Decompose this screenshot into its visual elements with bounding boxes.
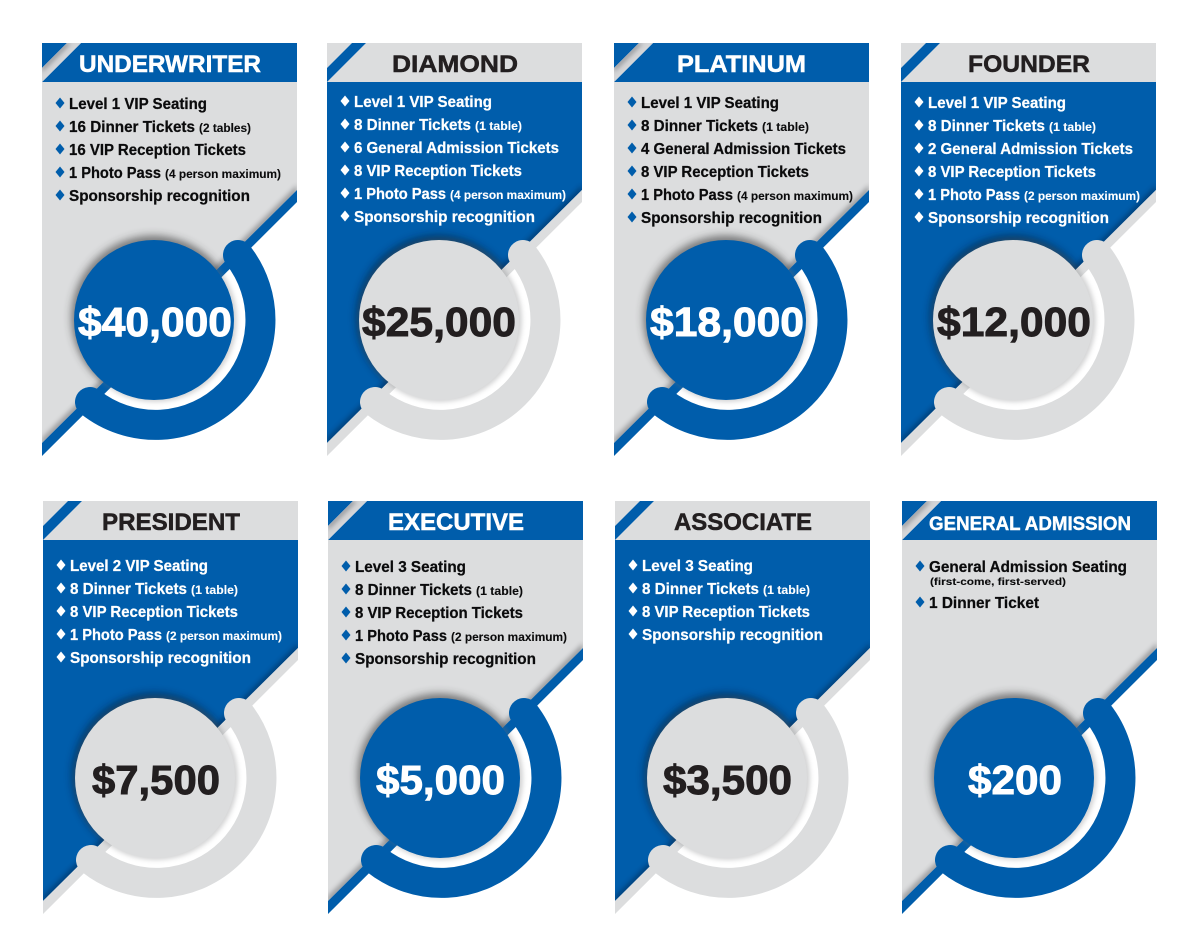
benefits list: 4 General Admission Tickets <box>641 141 846 158</box>
benefits list: 1 Dinner Ticket <box>929 595 1040 612</box>
benefits list: 8 Dinner Tickets <box>642 581 759 598</box>
benefits list: (2 person maximum) <box>166 631 282 643</box>
price: $12,000: $12,000 <box>937 299 1091 345</box>
benefits list: Sponsorship recognition <box>928 210 1109 227</box>
benefits list: (first-come, first-served) <box>930 576 1066 588</box>
heading: Associate: ASSOCIATE <box>674 509 812 536</box>
benefits list: Sponsorship recognition <box>69 188 250 205</box>
benefits list <box>628 95 853 227</box>
benefits list <box>56 558 282 667</box>
benefits list: Level 3 Seating <box>642 558 753 575</box>
benefits list: (1 table) <box>1049 122 1096 134</box>
benefits list: 8 VIP Reception Tickets <box>354 163 522 180</box>
benefits list <box>914 95 1140 227</box>
benefits list: 1 Photo Pass <box>355 628 447 645</box>
benefits list <box>916 559 1127 612</box>
benefits list: (2 tables) <box>199 123 251 135</box>
price: $5,000: $5,000 <box>376 757 505 803</box>
benefits list: Sponsorship recognition <box>641 210 822 227</box>
panel: Underwriter sponsorship card <box>42 43 297 456</box>
heading: Founder: FOUNDER <box>968 51 1090 78</box>
card background with ring and circle <box>615 501 870 914</box>
benefits list: 1 Photo Pass <box>69 165 161 182</box>
benefits list: 1 Photo Pass <box>928 187 1020 204</box>
benefits list: 1 Photo Pass <box>354 186 446 203</box>
price: $40,000: $40,000 <box>78 299 232 345</box>
benefits list: 8 Dinner Tickets <box>70 581 187 598</box>
benefits list: 2 General Admission Tickets <box>928 141 1133 158</box>
heading: Diamond: DIAMOND <box>392 51 518 78</box>
benefits list: Sponsorship recognition <box>355 651 536 668</box>
card background with ring and circle <box>42 43 297 456</box>
heading: General Admission: GENERAL ADMISSION <box>929 514 1131 535</box>
price: $25,000: $25,000 <box>362 299 516 345</box>
benefits list: 8 Dinner Tickets <box>354 117 471 134</box>
panel: Diamond sponsorship card <box>327 43 582 456</box>
benefits list: (1 table) <box>475 121 522 133</box>
benefits list: (4 person maximum) <box>450 190 566 202</box>
benefits list: 8 VIP Reception Tickets <box>70 604 238 621</box>
benefits list: 8 VIP Reception Tickets <box>928 164 1096 181</box>
benefits list: 8 VIP Reception Tickets <box>641 164 809 181</box>
benefits list <box>56 96 281 205</box>
benefits list: Sponsorship recognition <box>70 650 251 667</box>
benefits list: (1 table) <box>476 586 523 598</box>
benefits list: Sponsorship recognition <box>354 209 535 226</box>
benefits list: Sponsorship recognition <box>642 627 823 644</box>
benefits list: 1 Photo Pass <box>641 187 733 204</box>
benefits list <box>340 94 566 226</box>
panel: Platinum sponsorship card <box>614 43 869 456</box>
heading: Executive: EXECUTIVE <box>388 509 524 536</box>
benefits list: Level 1 VIP Seating <box>928 95 1066 112</box>
benefits list: 16 Dinner Tickets <box>69 119 195 136</box>
price: $3,500: $3,500 <box>663 757 792 803</box>
card background with ring and circle <box>614 43 869 456</box>
benefits list <box>628 558 823 644</box>
benefits list: 8 Dinner Tickets <box>641 118 758 135</box>
benefits list: (1 table) <box>763 585 810 597</box>
benefits list: 6 General Admission Tickets <box>354 140 559 157</box>
card background with ring and circle <box>328 501 583 914</box>
benefits list: (1 table) <box>762 122 809 134</box>
benefits list: (4 person maximum) <box>737 191 853 203</box>
benefits list: General Admission Seating <box>929 559 1127 576</box>
benefits list: Level 3 Seating <box>355 559 466 576</box>
benefits list <box>342 559 567 668</box>
panel: Founder sponsorship card <box>901 43 1156 456</box>
card background with ring and circle <box>901 43 1156 456</box>
benefits list: 8 Dinner Tickets <box>355 582 472 599</box>
benefits list: Level 1 VIP Seating <box>354 94 492 111</box>
benefits list: (1 table) <box>191 585 238 597</box>
benefits list: Level 2 VIP Seating <box>70 558 208 575</box>
panel: Associate sponsorship card <box>615 501 870 914</box>
heading: Underwriter: UNDERWRITER <box>79 51 261 78</box>
benefits list: (2 person maximum) <box>451 632 567 644</box>
card background with ring and circle <box>902 501 1157 914</box>
price: $200: $200 <box>968 757 1062 803</box>
card background with ring and circle <box>327 43 582 456</box>
benefits list: 8 VIP Reception Tickets <box>642 604 810 621</box>
price: $18,000: $18,000 <box>650 299 804 345</box>
panel: General Admission card <box>902 501 1157 914</box>
benefits list: (4 person maximum) <box>165 169 281 181</box>
benefits list: Level 1 VIP Seating <box>69 96 207 113</box>
benefits list: (2 person maximum) <box>1024 191 1140 203</box>
heading: Platinum: PLATINUM <box>677 51 806 78</box>
benefits list: Level 1 VIP Seating <box>641 95 779 112</box>
heading: President: PRESIDENT <box>102 509 240 536</box>
benefits list: 8 Dinner Tickets <box>928 118 1045 135</box>
benefits list: 16 VIP Reception Tickets <box>69 142 246 159</box>
panel: President sponsorship card <box>43 501 298 914</box>
panel: Executive sponsorship card <box>328 501 583 914</box>
card background with ring and circle <box>43 501 298 914</box>
price: $7,500: $7,500 <box>92 757 220 803</box>
benefits list: 1 Photo Pass <box>70 627 162 644</box>
benefits list: 8 VIP Reception Tickets <box>355 605 523 622</box>
